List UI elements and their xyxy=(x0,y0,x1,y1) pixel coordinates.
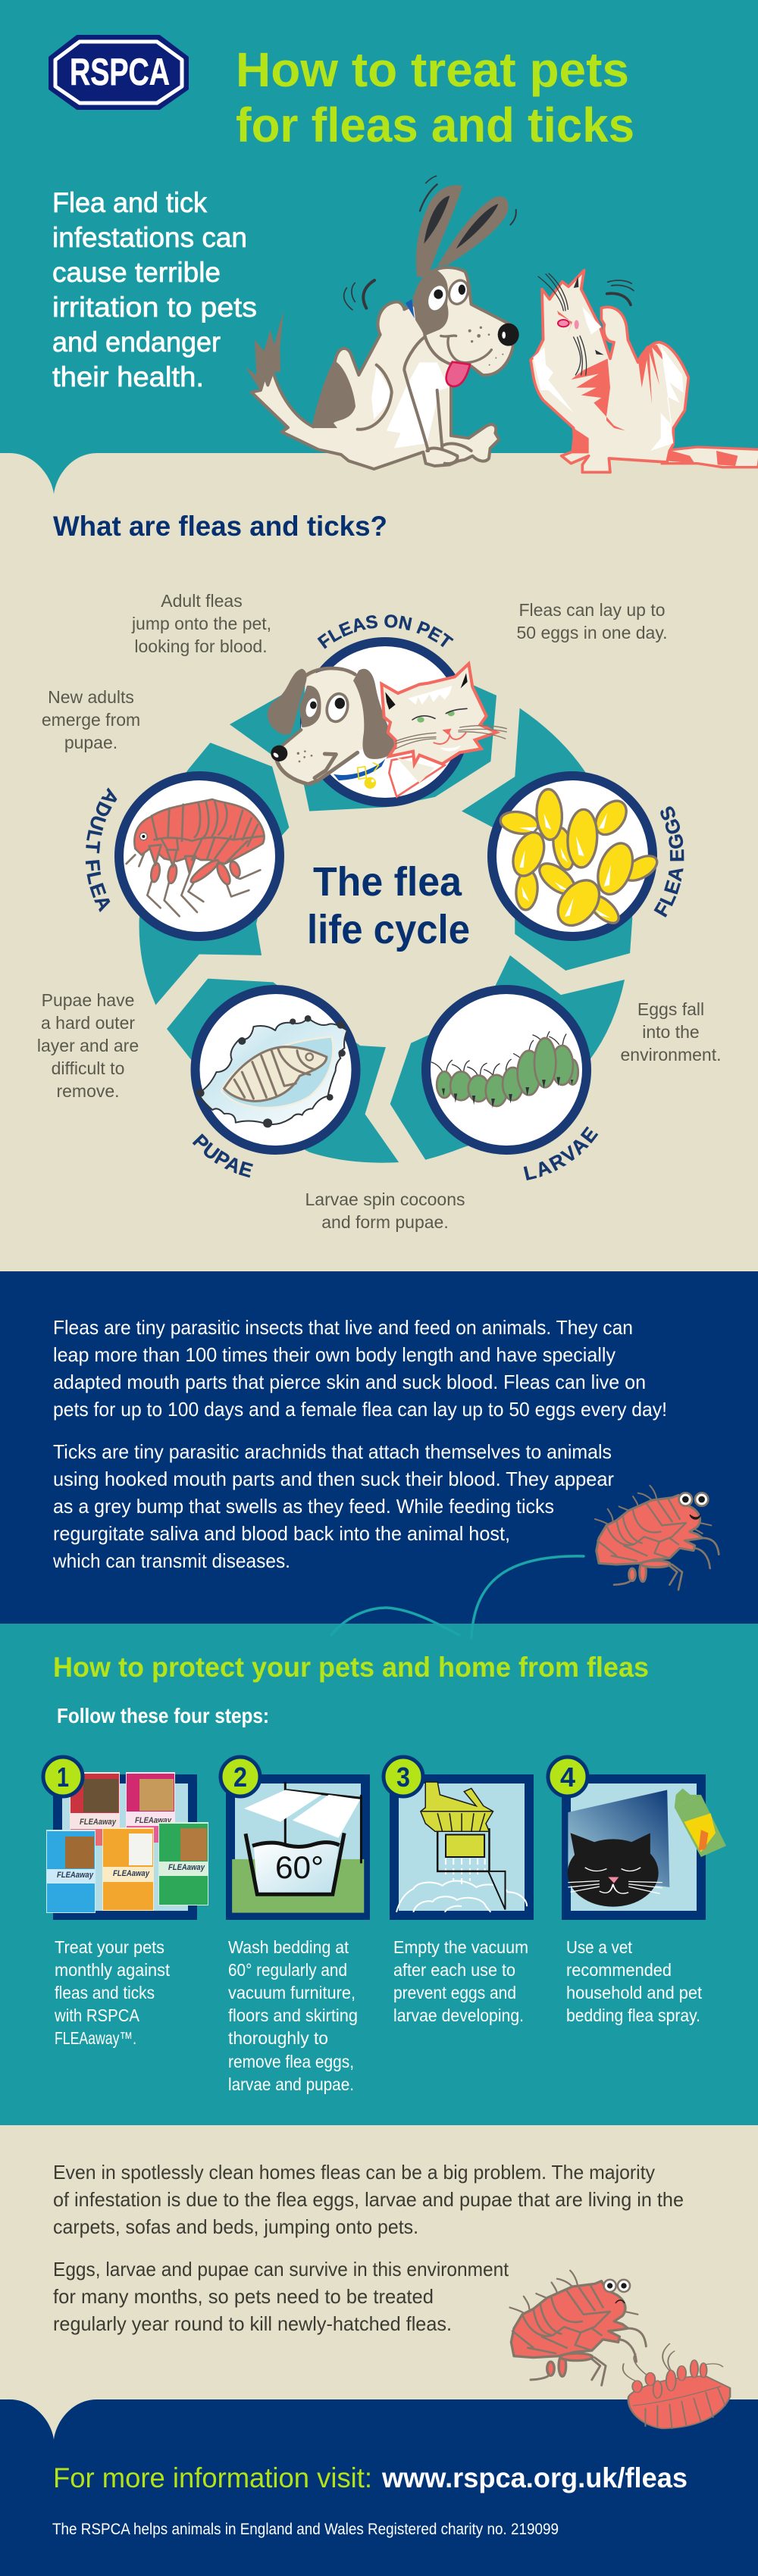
caption: eggs fall: Eggs fall xyxy=(637,999,704,1019)
center title: the flea life cycle xyxy=(307,859,470,952)
step 4 text: household and pet xyxy=(566,1983,703,2002)
step 4 text: Use a vet xyxy=(566,1937,633,1957)
heading: what are fleas and ticks: What are fleas and ticks? xyxy=(53,511,387,542)
caption: pupae have: a hard outer xyxy=(41,1013,135,1033)
label: fleas on pet: FLEAS ON PET xyxy=(317,614,453,649)
caption: pupae have xyxy=(37,990,139,1101)
text: fleas paragraph: adapted mouth parts that pierce skin and suck blood. Fleas can live on xyxy=(53,1371,646,1393)
step 2: washing: 60° xyxy=(275,1849,324,1885)
label: flea eggs: FLEA EGGS xyxy=(653,806,684,918)
step 2 text: larvae and pupae. xyxy=(228,2074,354,2094)
caption: larvae spin: and form pupae. xyxy=(321,1212,449,1232)
step 2 text: Wash bedding at xyxy=(228,1937,349,1957)
footer: more information: www.rspca.org.uk/fleas xyxy=(381,2462,688,2493)
badge 3: 3 xyxy=(396,1762,410,1793)
intro text: cause terrible xyxy=(52,257,221,288)
center title: the flea life cycle: The flea xyxy=(313,859,462,905)
text: eggs larvae paragraph xyxy=(53,2258,509,2335)
label: adult flea: ADULT FLEA xyxy=(85,787,117,912)
step 2 text: vacuum furniture, xyxy=(228,1983,356,2002)
panel: cream advice background xyxy=(0,2125,758,2399)
circle: adult flea xyxy=(85,771,284,941)
title: How to treat pets xyxy=(236,42,629,97)
caption: new adults xyxy=(42,687,140,752)
intro text: their health. xyxy=(52,361,204,392)
text: ticks paragraph xyxy=(52,1440,614,1572)
caption: eggs fall: environment. xyxy=(621,1045,721,1064)
illustration: jumping flea xyxy=(595,1486,719,1590)
text: ticks paragraph: Ticks are tiny parasitic arachnids that attach themselves to animals xyxy=(53,1440,612,1463)
text: ticks paragraph: using hooked mouth parts and then suck their blood. They appear xyxy=(53,1468,614,1490)
step 2: washing xyxy=(226,1776,370,1918)
badge 1 xyxy=(43,1757,83,1796)
text: fleas paragraph xyxy=(53,1316,667,1421)
caption: eggs fall xyxy=(621,999,721,1064)
intro text xyxy=(52,187,257,392)
logo: RSPCA xyxy=(50,36,187,108)
title: for fleas and ticks xyxy=(236,98,634,152)
caption: pupae have: difficult to xyxy=(52,1058,124,1078)
caption: larvae spin: Larvae spin cocoons xyxy=(305,1190,465,1209)
footer: more information xyxy=(53,2462,688,2493)
footer notch xyxy=(10,2399,97,2440)
caption: adult fleas: Adult fleas xyxy=(161,591,243,611)
illustration: dog scratching xyxy=(246,176,519,469)
text: ticks paragraph: regurgitate saliva and blood back into the animal host, xyxy=(53,1522,510,1545)
circle: larvae xyxy=(421,985,599,1180)
caption: eggs fall: into the xyxy=(642,1022,700,1042)
step 4 text: bedding flea spray. xyxy=(566,2005,700,2025)
footer: charity line: The RSPCA helps animals in England and Wales Registered charity no. 219099 xyxy=(52,2521,559,2538)
step 1: product boxes xyxy=(46,1772,208,1918)
box: blue xyxy=(46,1830,96,1913)
step 3: vacuum xyxy=(390,1776,534,1918)
box: pink: FLEAaway xyxy=(135,1816,172,1825)
box: pink xyxy=(126,1772,175,1843)
panel: teal steps background xyxy=(0,1624,758,2125)
panel: navy footer background xyxy=(0,2399,758,2576)
text: eggs larvae paragraph: for many months, so pets need to be treated xyxy=(53,2285,434,2308)
box: red xyxy=(70,1772,120,1846)
header notch xyxy=(10,453,97,494)
step 3 text: Empty the vacuum xyxy=(393,1937,528,1957)
step 1 text: Treat your pets xyxy=(55,1937,164,1957)
box: red: FLEAaway xyxy=(80,1818,117,1827)
illustration: standing flea xyxy=(510,2271,646,2385)
step 1 text: FLEAaway™. xyxy=(55,2028,136,2048)
text: eggs larvae paragraph: Eggs, larvae and pupae can survive in this environment xyxy=(53,2258,509,2281)
badge 2: 2 xyxy=(233,1762,247,1793)
badge 4: 4 xyxy=(560,1762,575,1793)
text: fleas paragraph: leap more than 100 times their own body length and have specially xyxy=(53,1343,615,1366)
step 1 text: with RSPCA xyxy=(54,2005,140,2025)
badge 2 xyxy=(221,1757,260,1796)
chart: flea life cycle xyxy=(37,591,721,1232)
step 4 text: recommended xyxy=(566,1960,672,1980)
step 4: flea spray xyxy=(562,1776,726,1918)
intro text: irritation to pets xyxy=(52,292,257,323)
arrow: flea jump trail xyxy=(331,1556,584,1638)
text: clean homes paragraph: Even in spotlessly clean homes fleas can be a big problem. The majority xyxy=(53,2161,655,2184)
text: fleas paragraph: pets for up to 100 days and a female flea can lay up to 50 eggs every day! xyxy=(53,1398,667,1421)
text: clean homes paragraph: carpets, sofas and beds, jumping onto pets. xyxy=(53,2215,418,2238)
illustration: cat scratching xyxy=(531,270,758,472)
intro text: Flea and tick xyxy=(52,187,207,218)
box: orange xyxy=(102,1827,154,1911)
step 2 text: 60° regularly and xyxy=(228,1960,347,1980)
illustration: upside-down flea xyxy=(623,2343,730,2428)
box: orange: FLEAaway xyxy=(113,1869,150,1878)
step 3 text xyxy=(393,1937,528,2025)
step 2 text xyxy=(228,1937,358,2094)
intro text: infestations can xyxy=(52,222,247,253)
circle: pupae xyxy=(191,985,361,1177)
text: eggs larvae paragraph: regularly year round to kill newly-hatched fleas. xyxy=(53,2312,452,2335)
caption: pupae have: remove. xyxy=(56,1081,120,1101)
cycle arrows xyxy=(139,639,632,1163)
step 3 text: after each use to xyxy=(393,1960,515,1980)
subheading: follow these steps: Follow these four steps: xyxy=(57,1704,269,1727)
center title: the flea life cycle: life cycle xyxy=(307,907,470,952)
text: fleas paragraph: Fleas are tiny parasitic insects that live and feed on animals. They can xyxy=(53,1316,633,1339)
step 2 text: thoroughly to xyxy=(228,2028,328,2048)
text: clean homes paragraph: of infestation is due to the flea eggs, larvae and pupae that are living in the xyxy=(53,2188,684,2211)
logo: RSPCA: RSPCA xyxy=(70,51,170,93)
caption: pupae have: layer and are xyxy=(37,1036,139,1055)
caption: larvae spin xyxy=(305,1190,465,1232)
title xyxy=(236,42,634,152)
caption: new adults: emerge from xyxy=(42,710,140,730)
box: green xyxy=(158,1822,208,1905)
step 3 text: larvae developing. xyxy=(393,2005,524,2025)
label: pupae: PUPAE xyxy=(193,1133,253,1177)
caption: adult fleas: jump onto the pet, xyxy=(131,614,271,633)
hidden arc guides for labels xyxy=(86,627,684,1182)
badge 4 xyxy=(548,1757,587,1796)
intro text: and endanger xyxy=(52,327,221,358)
caption: adult fleas xyxy=(131,591,271,656)
step 2 text: floors and skirting xyxy=(228,2005,358,2025)
circle: flea eggs xyxy=(487,771,684,941)
panel: cream life cycle background xyxy=(0,453,758,1271)
panel: header background xyxy=(0,0,758,453)
step 1 text xyxy=(54,1937,171,2048)
step 1 text: monthly against xyxy=(55,1960,171,1980)
step 4 text xyxy=(566,1937,703,2025)
caption: fleas can lay: 50 eggs in one day. xyxy=(516,623,668,642)
caption: new adults: pupae. xyxy=(64,733,117,752)
box: blue: FLEAaway xyxy=(57,1871,94,1880)
heading: how to protect: How to protect your pets and home from fleas xyxy=(53,1652,649,1683)
text: ticks paragraph: which can transmit diseases. xyxy=(52,1549,290,1572)
caption: fleas can lay: Fleas can lay up to xyxy=(518,600,666,620)
panel: navy facts background xyxy=(0,1271,758,1624)
step 3 text: prevent eggs and xyxy=(393,1983,516,2002)
step 2 text: remove flea eggs, xyxy=(228,2052,354,2071)
text: clean homes paragraph xyxy=(53,2161,684,2238)
caption: fleas can lay xyxy=(516,600,668,642)
circle: fleas on pet xyxy=(267,614,507,807)
label: larvae: LARVAE xyxy=(523,1126,599,1180)
badge 3 xyxy=(384,1757,423,1796)
caption: adult fleas: looking for blood. xyxy=(134,636,268,656)
footer: more information: For more information visit: xyxy=(53,2462,372,2493)
step 1 text: fleas and ticks xyxy=(55,1983,155,2002)
caption: pupae have: Pupae have xyxy=(42,990,134,1010)
badge 1: 1 xyxy=(57,1762,69,1793)
text: ticks paragraph: as a grey bump that swells as they feed. While feeding ticks xyxy=(53,1495,554,1518)
box: green: FLEAaway xyxy=(168,1863,205,1872)
caption: new adults: New adults xyxy=(48,687,134,707)
